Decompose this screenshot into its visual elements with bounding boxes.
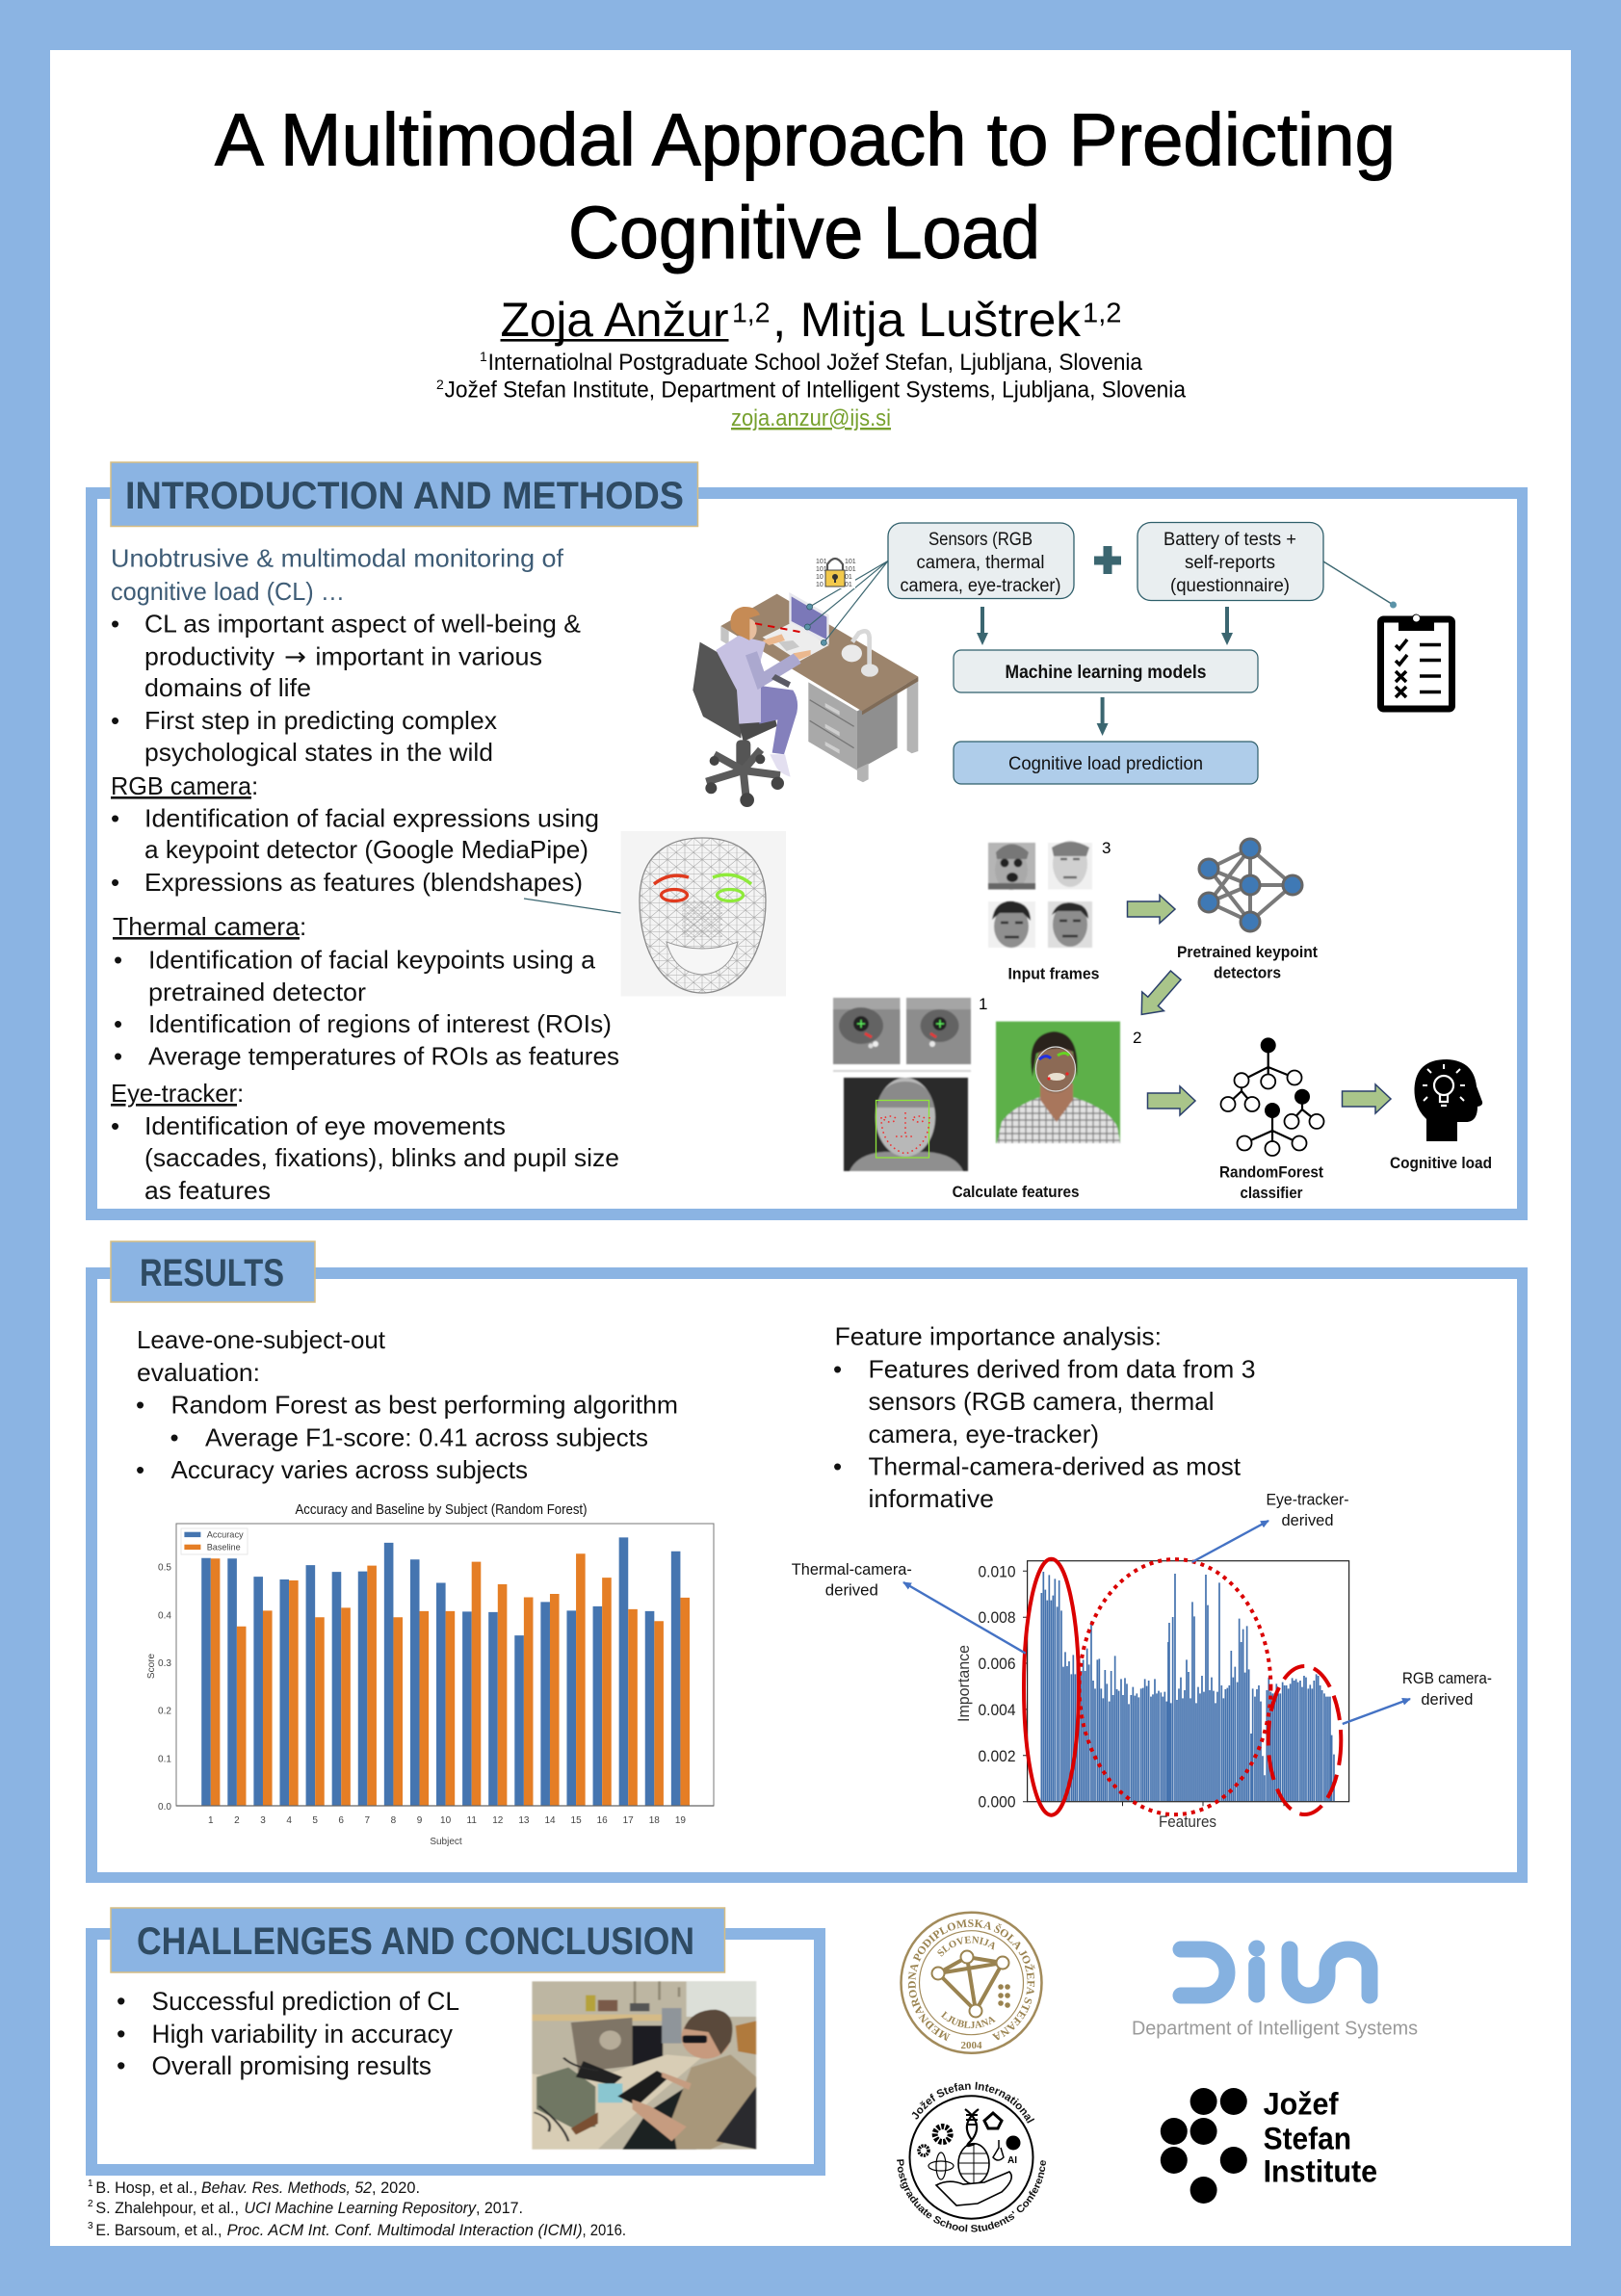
importance axis ticks and labels: 0.004 [979,1701,1015,1719]
chart axis labels: Score [146,1654,157,1679]
chart axis labels: 2 [234,1815,240,1826]
icon: person at desk with laptop [693,561,918,807]
logo: jožef stefan institute [1161,2087,1377,2204]
label: eye-tracker-derived: derived [1281,1511,1333,1529]
heading: results [111,1241,315,1302]
title [215,98,1396,274]
icon: padlock with binary: 01 [845,574,852,581]
connector: battery to clipboard [1323,561,1397,609]
text block: thermal camera: • [114,1042,122,1071]
text block: conclusions: • [117,2020,125,2048]
text block: RGB camera: Expressions as features (blendshapes) [144,868,583,897]
affiliations and email [436,349,1187,431]
arrow: thermal label [903,1582,1026,1654]
importance axis ticks and labels: 0.006 [979,1655,1015,1673]
heading: challenges and conclusion: CHALLENGES AND CONCLUSION [137,1920,694,1963]
text block: unobtrusive monitoring: Unobtrusive & multimodal monitoring of [111,544,564,573]
logo: jožef stefan institute: Institute [1264,2154,1377,2189]
connector: expressions to face mesh [524,899,620,913]
affiliations and email: Internatiolnal Postgraduate School Jožef Stefan, Ljubljana, Slovenia [488,350,1143,376]
text block: unobtrusive monitoring: CL as important aspect of well-being & [144,609,581,638]
label: random forest classifier: RandomForest [1219,1163,1323,1181]
arrow: detectors to features [1131,966,1187,1024]
chart axis labels: 1 [208,1815,214,1826]
importance axis ticks and labels: 0.008 [979,1608,1015,1627]
text block: RGB camera: • [111,804,119,833]
title: A Multimodal Approach to Predicting [215,98,1396,181]
importance axis ticks and labels: Importance [954,1645,973,1722]
text block: leave-one-subject-out evaluation: • [136,1391,144,1420]
label: rgb-camera-derived: derived [1421,1690,1473,1709]
text block: eye-tracker [111,1079,619,1205]
text block: eye-tracker: Identification of eye movements [144,1111,506,1140]
image: input frames faces [988,841,1092,948]
chart axis labels: 8 [391,1815,397,1826]
accuracy bars [201,1537,680,1806]
chart axis labels: 4 [286,1815,292,1826]
chart axis labels: 19 [675,1815,686,1826]
text block: thermal camera: Identification of regions of interest (ROIs) [148,1009,612,1038]
chart axis labels: 5 [312,1815,318,1826]
text block: leave-one-subject-out evaluation: Accuracy varies across subjects [171,1455,528,1484]
chart axis labels: 14 [544,1815,556,1826]
chart axis labels: 6 [338,1815,344,1826]
logo: department of intelligent systems [1132,1940,1418,2040]
text block: thermal camera: pretrained detector [148,978,366,1006]
box: machine learning models [954,650,1258,692]
chart axis labels: 0.4 [158,1610,171,1621]
importance axis ticks and labels: 0.002 [979,1747,1015,1765]
text block: unobtrusive monitoring: • [111,609,119,638]
chart axis labels: Subject [430,1837,462,1847]
text block: RGB camera [111,771,599,897]
ellipse: rgb features [1268,1666,1341,1814]
icon: keypoint neural network [1199,839,1302,931]
label: calculate features: Calculate features [953,1184,1080,1201]
text block: unobtrusive monitoring: important in various [315,642,542,671]
heading: introduction and methods: INTRODUCTION AND METHODS [125,475,684,517]
text block: feature importance analysis: Features derived from data from 3 [869,1355,1256,1384]
text block: thermal camera: Average temperatures of ROIs as features [148,1042,619,1071]
text block: feature importance analysis: • [833,1355,842,1384]
logo: department of intelligent systems: Department of Intelligent Systems [1132,2019,1418,2040]
icon: padlock with binary: 10 [816,582,824,588]
panel: introduction and methods [86,462,1528,1220]
icon: padlock with binary: 101 [845,559,856,565]
logo: jožef stefan institute: Jožef [1264,2087,1339,2122]
label: thermal-camera-derived: derived [825,1581,878,1600]
label: random forest classifier [1219,1163,1323,1202]
image: thermal face with keypoints [844,1078,968,1171]
affiliations and email: Jožef Stefan Institute, Department of Intelligent Systems, Ljubljana, Slovenia [445,378,1187,403]
chart axis labels: 0.3 [158,1658,171,1669]
heading: challenges and conclusion [111,1908,724,1972]
baseline bars [211,1553,690,1806]
logo: jožef stefan institute: Stefan [1264,2122,1351,2156]
text block: unobtrusive monitoring: cognitive load (CL) … [111,577,345,606]
arrow: features to classifier [1148,1086,1195,1115]
chart axis labels: 13 [518,1815,530,1826]
text block: conclusions: • [117,2051,125,2080]
authors: Zoja Anžur [501,293,728,347]
label: random forest classifier: classifier [1241,1185,1303,1202]
text block: thermal camera: • [114,946,122,975]
text block: RGB camera: Identification of facial expressions using [144,804,599,833]
affiliations and email: 2 [436,377,444,392]
text block: RGB camera: • [111,868,119,897]
label: input frames: Input frames [1007,965,1100,982]
text block: RGB camera: RGB camera [111,771,252,800]
box: machine learning models: Machine learning models [1006,663,1206,683]
label: eye-tracker-derived [1266,1491,1348,1529]
box: cognitive load prediction [954,742,1258,784]
arrow: battery to models [1221,607,1233,645]
text block: conclusions: • [117,1987,125,2016]
chart legend [181,1528,248,1554]
chart legend: Baseline [207,1543,241,1552]
affiliations and email: zoja.anzur@ijs.si [731,405,891,431]
chart axis labels: 0.2 [158,1707,171,1717]
chart axis labels: 0.5 [158,1563,171,1574]
icon: plus [1094,546,1121,574]
text block: feature importance analysis: sensors (RGB camera, thermal [869,1387,1214,1416]
text block: feature importance analysis: • [833,1452,842,1481]
text block: leave-one-subject-out evaluation: • [136,1455,144,1484]
box: battery of tests: Battery of tests + [1163,530,1296,550]
authors: , Mitja Luštrek [772,293,1082,347]
text block: leave-one-subject-out evaluation: • [170,1423,179,1452]
references: B. Hosp, et al., [95,2179,197,2197]
title: Cognitive Load [568,192,1040,274]
authors: 1,2 [1083,299,1121,329]
text block: leave-one-subject-out evaluation: Average F1-score: 0.41 across subjects [205,1423,648,1452]
box: sensors: camera, thermal [917,553,1044,573]
text block: eye-tracker: • [111,1111,119,1140]
logo: students conference: Jožef Stefan International [911,2082,1034,2124]
arrow: sensors to models [977,607,988,645]
panel: challenges and conclusion [86,1908,825,2176]
box: sensors [888,523,1074,599]
references: , 2017. [476,2199,523,2217]
references: Proc. ACM Int. Conf. Multimodal Interaction (ICMI) [227,2221,583,2239]
box: battery of tests [1137,522,1323,601]
chart axis labels: 11 [467,1815,477,1826]
text block: leave-one-subject-out evaluation: Random Forest as best performing algorithm [171,1391,678,1420]
icon: padlock with binary: 10 [816,574,824,581]
logo: students conference [897,2082,1046,2232]
icon: padlock with binary [815,556,856,588]
chart axis labels: 0.0 [158,1802,171,1813]
arrow: eye-tracker label [1192,1521,1268,1562]
references: 1 [88,2179,93,2189]
icon: padlock with binary: 101 [816,566,827,573]
icon: padlock with binary: 101 [816,559,827,565]
text block: feature importance analysis: Thermal-camera-derived as most [869,1452,1242,1481]
text block: leave-one-subject-out evaluation [136,1325,678,1484]
chart axis labels: 15 [571,1815,582,1826]
chart axes frame [176,1524,714,1806]
label: pretrained keypoint detectors [1177,944,1318,982]
label: eye-tracker-derived: Eye-tracker- [1266,1491,1348,1509]
text block: feature importance analysis: Feature importance analysis: [835,1322,1162,1351]
arrow: classifier to cognitive load [1343,1084,1391,1113]
label: 2: 2 [1133,1029,1141,1047]
text block: eye-tracker: (saccades, fixations), blinks and pupil size [144,1143,619,1172]
text block: conclusions: Overall promising results [152,2051,431,2080]
chart title: Accuracy and Baseline by Subject (Random Forest) [295,1502,588,1518]
chart legend: Accuracy [207,1530,244,1541]
image: RGB face with keypoints [996,1022,1120,1143]
box: battery of tests: self-reports [1185,553,1275,573]
chart axis labels: 0.1 [158,1754,171,1764]
panel: results [86,1241,1528,1883]
text block: eye-tracker: as features [144,1176,271,1205]
text block: conclusions: High variability in accuracy [152,2020,453,2048]
label: rgb-camera-derived [1402,1669,1492,1709]
chart axis labels: 7 [365,1815,371,1826]
affiliations and email: 1 [480,349,487,364]
logo: postgraduate school seal: MEDNARODNA PODIPLOMSKA ŠOLA JOŽEFA STEFANA [907,1919,1035,2042]
label: thermal-camera-derived: Thermal-camera- [792,1560,912,1578]
logo: postgraduate school seal: 2004 [961,2040,982,2051]
text block: unobtrusive monitoring: → [284,643,306,672]
chart axis labels: 17 [623,1815,634,1826]
authors [501,293,1121,347]
chart: feature importance [792,1491,1492,1831]
text block: unobtrusive monitoring: psychological states in the wild [144,738,493,767]
chart axis labels: 9 [417,1815,423,1826]
references: 2 [88,2199,93,2209]
chart axis labels [146,1563,714,1847]
logo: students conference: Postgraduate School Students' Conference [897,2159,1046,2232]
chart axis labels: 10 [440,1815,452,1826]
box: sensors: camera, eye-tracker) [900,576,1061,596]
logo: students conference: AI [1007,2155,1017,2166]
text block: feature importance analysis [833,1322,1256,1513]
label: thermal-camera-derived [792,1560,912,1600]
ellipse: thermal features [1024,1559,1079,1815]
image: face mesh with keypoints [620,831,786,996]
arrow: rgb label [1343,1699,1410,1724]
importance axis ticks and labels: 0.010 [979,1562,1015,1581]
label: pretrained keypoint detectors: detectors [1214,965,1281,982]
chart axis labels: 18 [649,1815,660,1826]
label: pretrained keypoint detectors: Pretrained keypoint [1177,944,1318,961]
text block: RGB camera: a keypoint detector (Google MediaPipe) [144,835,588,864]
text block: unobtrusive monitoring: First step in predicting complex [144,706,497,735]
chart axis labels: 3 [260,1815,266,1826]
icon: head with light bulb [1414,1059,1482,1141]
text block: unobtrusive monitoring: • [111,706,119,735]
label: rgb-camera-derived: RGB camera- [1402,1669,1492,1687]
logo: postgraduate school seal: LJUBLJANA [940,2011,996,2028]
references: S. Zhalehpour, et al., [95,2199,239,2217]
chart axis labels: 16 [597,1815,608,1826]
label: 1: 1 [979,995,987,1013]
box: battery of tests: (questionnaire) [1170,576,1290,596]
box: cognitive load prediction: Cognitive load prediction [1008,754,1203,774]
text block: feature importance analysis: informative [869,1484,994,1513]
text block: eye-tracker: Eye-tracker [111,1079,237,1108]
box: sensors: Sensors (RGB [928,530,1033,550]
text block: feature importance analysis: camera, eye-tracker) [869,1420,1099,1448]
text block: unobtrusive monitoring [111,544,581,767]
logo: postgraduate school seal: SLOVENIJA [937,1936,994,1957]
importance axis ticks and labels: Features [1159,1813,1216,1831]
importance axes frame [1028,1561,1349,1802]
text block: unobtrusive monitoring: productivity [144,642,275,671]
chart axis labels: 12 [492,1815,504,1826]
arrow: models to prediction [1097,697,1109,736]
references: 3 [88,2221,93,2231]
importance axis ticks and labels: 0.000 [979,1793,1015,1812]
text block: thermal camera [113,912,619,1071]
importance bars [1041,1572,1334,1801]
icon: padlock with binary: 01 [845,582,852,588]
text block: leave-one-subject-out evaluation: Leave-one-subject-out [137,1325,386,1354]
heading: results: RESULTS [140,1252,284,1294]
text block: thermal camera: Identification of facial keypoints using a [148,946,596,975]
text block: thermal camera: : [300,912,306,941]
icon: padlock with binary: 101 [845,566,856,573]
text block: leave-one-subject-out evaluation: evaluation: [137,1358,260,1387]
arrow: frames to detectors [1127,896,1175,923]
text block: RGB camera: : [251,771,258,800]
importance axis ticks and labels [954,1562,1284,1831]
references: Behav. Res. Methods, 52 [201,2179,373,2197]
references: , 2016. [582,2221,626,2239]
text block: eye-tracker: : [237,1079,244,1108]
icon: clipboard checklist [1381,614,1452,709]
label: cognitive load: Cognitive load [1390,1155,1492,1172]
chart: accuracy and baseline by subject [146,1502,714,1847]
references: UCI Machine Learning Repository [245,2199,477,2217]
references: , 2020. [372,2179,420,2197]
icon: random forest trees [1221,1037,1323,1156]
text block: conclusions [117,1987,459,2080]
references [88,2179,626,2239]
ellipse: eye-tracker features [1080,1559,1270,1814]
heading: introduction and methods [111,462,697,526]
text block: thermal camera: Thermal camera [113,912,301,941]
references: E. Barsoum, et al., [95,2221,222,2239]
text block: unobtrusive monitoring: domains of life [144,673,311,702]
text block: conclusions: Successful prediction of CL [152,1987,459,2016]
image: eye tracking frames [833,998,971,1072]
label: 3: 3 [1102,839,1111,857]
authors: 1,2 [732,299,771,329]
image: participant at workstation [532,1981,756,2150]
text block: thermal camera: • [114,1009,122,1038]
